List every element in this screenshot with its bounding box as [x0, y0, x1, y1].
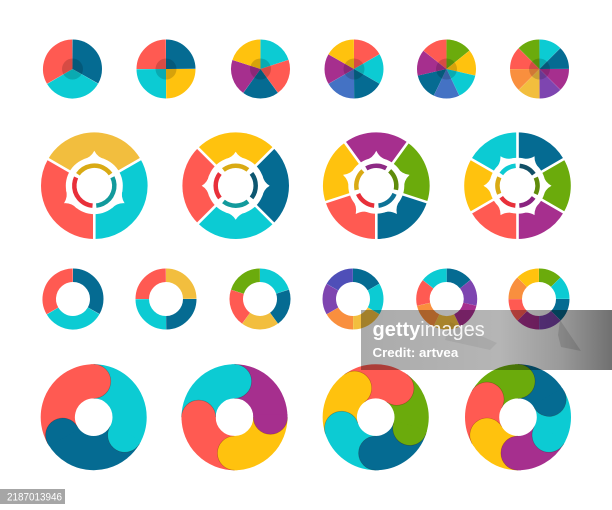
donut: 4 segments — [142, 275, 190, 323]
watermark logo text: gettyimages — [372, 319, 485, 341]
image id number: 2187013946 — [7, 492, 62, 504]
pie: 8 slices — [519, 48, 560, 90]
donut: 8 segments — [505, 265, 573, 333]
swirl: 3 segments — [39, 364, 143, 466]
pie: 6 slices — [334, 49, 374, 89]
donut: 7 segments — [413, 266, 480, 332]
donut: 5 segments — [227, 266, 293, 332]
row 2: segmented wheels with star centers — [47, 131, 565, 241]
pie: 5 slices — [240, 48, 281, 90]
wheel: 3 segments — [47, 149, 142, 241]
donut: 6 segments — [321, 267, 385, 331]
swirl: 5 segments — [320, 364, 427, 470]
swirl: 6 segments — [464, 364, 572, 470]
pie: 3 slices — [52, 49, 93, 89]
watermark credit text: Credit: artvea — [372, 345, 459, 360]
wheel: 4 segments — [197, 147, 275, 225]
wheel: 6 segments — [470, 131, 565, 241]
row 3: small donut charts — [41, 265, 573, 333]
pie: 4 slices — [151, 54, 181, 84]
swirl: 4 segments — [182, 364, 288, 470]
row 1: small pie charts — [52, 48, 560, 90]
image id tag — [0, 489, 65, 504]
wheel: 5 segments — [324, 141, 429, 241]
donut: 3 segments — [41, 267, 105, 331]
watermark band — [361, 310, 612, 370]
row 4: swirl donut charts — [39, 364, 572, 470]
pie: 7 slices — [426, 48, 467, 90]
